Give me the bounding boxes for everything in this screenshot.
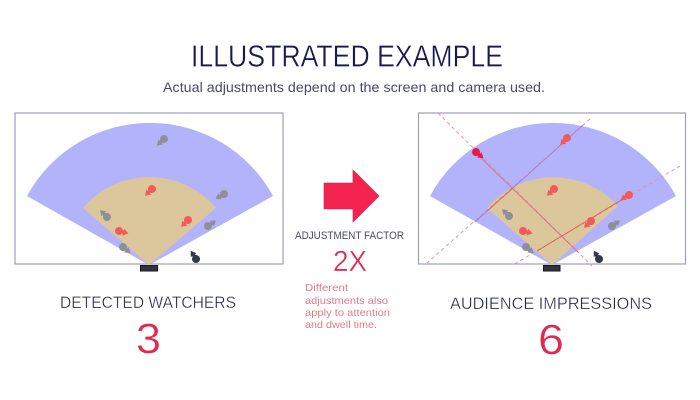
inner attention zone [487,177,618,265]
adjustment note [305,282,390,331]
gray watchers [499,206,622,256]
detected watchers label: DETECTED WATCHERS [60,293,236,312]
audience impressions value: 6 [538,316,564,364]
panel: detected watchers diagram [15,113,283,271]
adjustment note: Different [305,282,348,294]
inner attention zone [83,177,216,265]
detected watchers value: 3 [136,315,161,363]
adjustment note: apply to attention [305,307,390,319]
red counted watchers [518,132,634,237]
camera [140,266,158,271]
dashed sight lines [427,113,680,266]
dark person outside zone [590,249,605,265]
solid sight line segments [475,125,623,252]
dark person outside zone [187,249,202,265]
adjustment factor value: 2X [333,246,367,278]
gray watchers outside attention [97,133,229,256]
outer viewing zone [27,123,273,265]
title: ILLUSTRATED EXAMPLE [191,38,503,74]
bright red watcher [470,146,486,161]
adjustment factor label: ADJUSTMENT FACTOR [295,230,404,242]
arrow [324,170,379,222]
panel: audience impressions diagram [418,113,686,271]
audience impressions label: AUDIENCE IMPRESSIONS [450,294,652,313]
subtitle: Actual adjustments depend on the screen and camera used. [163,79,545,95]
red detected watchers [114,183,194,237]
camera [544,266,560,271]
outer viewing zone [430,123,676,265]
adjustment note: adjustments also [305,295,388,307]
adjustment note: and dwell time. [305,319,377,331]
